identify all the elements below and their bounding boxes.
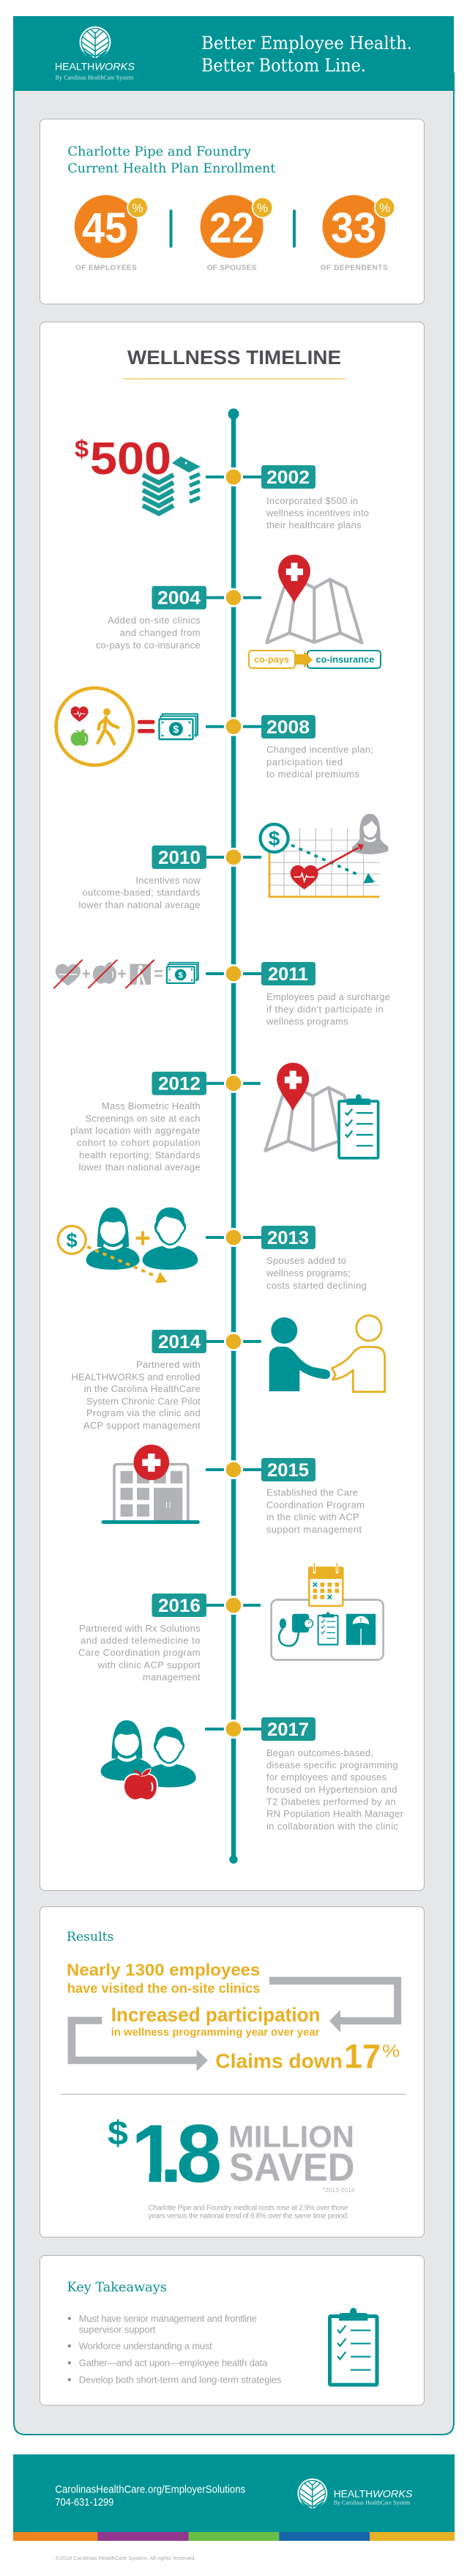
description: T2 Diabetes performed by an <box>266 1796 396 1807</box>
description: Began outcomes-based, <box>266 1747 373 1758</box>
description: Spouses added to <box>266 1255 346 1266</box>
description: for employees and spouses <box>266 1772 386 1783</box>
description: if they didn't participate in <box>266 1004 384 1015</box>
description: management <box>143 1672 201 1682</box>
footnote: years versus the national trend of 6.8% over the same time period. <box>148 2213 348 2221</box>
bullet list: Gather—and act upon—employee health data <box>79 2357 268 2368</box>
icon: map with pin and co-pays to co-insurance <box>249 555 381 668</box>
node <box>206 964 262 983</box>
description: in the clinic with ACP <box>266 1511 359 1522</box>
takeaways heading: Key Takeaways <box>67 2279 167 2295</box>
stat: 33% of dependents: % <box>379 201 390 215</box>
arrow: to claims down <box>67 2017 208 2071</box>
description: in collaboration with the clinic <box>266 1821 398 1832</box>
enrollment heading: Current Health Plan Enrollment <box>67 160 276 176</box>
description: wellness programs; <box>266 1267 351 1278</box>
stat: 33% of dependents: OF DEPENDENTS <box>321 264 388 272</box>
logo: Healthworks: HEALTH <box>55 62 94 73</box>
footer banner <box>13 2454 455 2541</box>
year badge <box>261 465 315 489</box>
description: disease specific programming <box>266 1760 398 1770</box>
stat: 22% of spouses: % <box>257 201 268 215</box>
stat: 45% of employees: 45 <box>82 204 127 252</box>
description: wellness incentives into <box>266 507 369 519</box>
stat: 45% of employees <box>75 195 149 272</box>
description: outcome-based; standards <box>82 887 201 898</box>
icon: spouses and declining cost: $ <box>67 1229 78 1251</box>
logo: Healthworks: By Carolinas HealthCare System <box>56 74 134 81</box>
stat: 22% of spouses: OF SPOUSES <box>207 264 257 272</box>
description: and added telemedicine to <box>81 1635 201 1646</box>
title: Better Bottom Line. <box>201 56 366 76</box>
stat: 33% of dependents <box>321 195 395 272</box>
description: lower than national average <box>79 899 201 910</box>
result: claims down 17%: Claims down <box>215 2049 343 2072</box>
description: ACP support management <box>83 1420 201 1431</box>
contact details: CarolinasHealthCare.org/EmployerSolutions <box>55 2483 245 2495</box>
colour stripe <box>13 2532 455 2541</box>
panel: key takeaways <box>40 2255 425 2405</box>
description <box>266 495 369 530</box>
copyright: ©2018 Carolinas HealthCare System. All rights reserved. <box>56 2555 196 2561</box>
result: claims down 17%: % <box>382 2041 400 2062</box>
year badge: 2015 <box>267 1460 309 1481</box>
result: claims down 17%: 17 <box>344 2037 381 2075</box>
icon: $500 cash stacks: $ <box>75 435 89 462</box>
entry: 2015 <box>102 1445 365 1535</box>
stat: 45% of employees: % <box>132 201 143 215</box>
node <box>206 848 261 867</box>
stat: $1.8 million saved: .8 <box>160 2108 222 2199</box>
footnote <box>148 2205 348 2221</box>
year badge <box>152 1330 206 1353</box>
footer logo <box>297 2479 413 2509</box>
description: Screenings on site at each <box>85 1113 201 1124</box>
bullet list: supervisor support <box>79 2324 156 2335</box>
description: costs started declining <box>266 1280 367 1291</box>
description: Mass Biometric Health <box>102 1100 201 1111</box>
description: their healthcare plans <box>266 519 362 530</box>
description <box>79 875 201 910</box>
description: health reporting; Standards <box>79 1150 201 1161</box>
stat: $1.8 million saved <box>108 2108 355 2199</box>
node <box>206 717 262 736</box>
icon: cost and health chart: $ <box>269 827 280 850</box>
result: increased participation: Increased participation <box>111 2004 321 2026</box>
description: Incorporated $500 in <box>266 495 358 506</box>
stat: 22% of spouses: 22 <box>209 204 254 252</box>
year badge: 2013 <box>267 1228 309 1248</box>
stat: 22% of spouses <box>201 195 273 272</box>
entry: 2013 <box>58 1207 367 1291</box>
node <box>206 588 261 607</box>
description: participation tied <box>266 756 343 767</box>
year badge <box>152 586 206 610</box>
divider <box>293 210 296 248</box>
node <box>206 1332 261 1351</box>
description: Established the Care <box>266 1487 358 1498</box>
node <box>206 1596 261 1615</box>
icon: no participation equals surcharge <box>53 960 198 988</box>
description: Added on-site clinics <box>108 615 201 626</box>
icon: spouses and declining cost <box>58 1207 198 1283</box>
description: Care Coordination program <box>78 1647 201 1658</box>
description: to medical premiums <box>266 769 360 780</box>
year badge <box>261 715 315 739</box>
description: focused on Hypertension and <box>266 1784 397 1795</box>
logo: Healthworks: WORKS <box>94 62 135 73</box>
description <box>266 1747 404 1832</box>
year badge: 2011 <box>268 964 308 985</box>
description: in the Carolina HealthCare <box>84 1383 201 1394</box>
stat: 33% of dependents: 33 <box>331 204 376 252</box>
timeline spine <box>228 409 239 1864</box>
icon: map with pin and co-pays to co-insurance: co-insurance <box>315 654 374 665</box>
year badge: 2008 <box>266 717 310 738</box>
icon: telemedicine devices <box>272 1563 384 1660</box>
year badge <box>152 1594 206 1617</box>
description <box>78 1623 201 1682</box>
description <box>266 1255 367 1291</box>
description <box>72 1359 201 1431</box>
entry: 2012 <box>70 1062 378 1173</box>
description: System Chronic Care Pilot <box>86 1396 201 1407</box>
footnote: Charlotte Pipe and Foundry medical costs rose at 2.9% over those <box>148 2205 348 2213</box>
footer logo: WORKS <box>373 2487 413 2499</box>
year badge <box>152 1072 206 1095</box>
enrollment heading <box>67 144 276 176</box>
year badge <box>152 845 206 869</box>
year badge <box>261 1226 315 1249</box>
entry: 2014 <box>72 1316 385 1431</box>
node <box>206 1228 262 1247</box>
enrollment heading: Charlotte Pipe and Foundry <box>67 144 252 159</box>
result: nearly 1300 employees: have visited the on-site clinics <box>67 1981 260 1996</box>
year badge: 2002 <box>266 467 310 488</box>
description: lower than national average <box>79 1162 201 1173</box>
result: nearly 1300 employees: Nearly 1300 employees <box>67 1961 260 1980</box>
result: nearly 1300 employees <box>67 1961 260 1996</box>
entry: 2002 <box>75 434 369 530</box>
entry: 2010 <box>79 814 388 910</box>
description: Partnered with <box>136 1359 201 1370</box>
description: and changed from <box>120 627 201 638</box>
description: co-pays to co-insurance <box>96 640 201 651</box>
icon: clinic building <box>102 1445 200 1524</box>
icon: healthy behaviours equal cash: $ <box>173 723 179 735</box>
year badge: 2014 <box>158 1332 201 1352</box>
title <box>201 33 412 76</box>
results heading: Results <box>67 1930 113 1944</box>
logo: Healthworks <box>55 26 135 81</box>
description: wellness programs <box>266 1016 348 1027</box>
description: with clinic ACP support <box>97 1659 201 1670</box>
description: support management <box>266 1524 362 1535</box>
icon: map with pin and clipboard <box>265 1062 378 1158</box>
entry: 2008 <box>56 688 373 780</box>
stat: $1.8 million saved: 1 <box>131 2108 176 2199</box>
node <box>206 1460 262 1479</box>
header banner <box>13 16 454 91</box>
icon: map with pin and co-pays to co-insurance: co-pays <box>254 654 289 665</box>
icon: $500 cash stacks: 500 <box>90 434 171 484</box>
description <box>70 1100 201 1173</box>
stat: $1.8 million saved: MILLION <box>228 2120 354 2154</box>
arrow: to increased participation <box>269 1977 401 2032</box>
description: Incentives now <box>135 875 201 886</box>
year badge: 2004 <box>157 588 201 609</box>
heading: WELLNESS TIMELINE <box>127 347 341 369</box>
year badge <box>261 1458 315 1481</box>
panel: enrollment <box>40 119 425 304</box>
node <box>206 467 262 486</box>
description: Program via the clinic and <box>86 1407 201 1418</box>
year badge: 2010 <box>158 848 201 868</box>
year badge: 2017 <box>267 1720 309 1740</box>
entry: 2017 <box>101 1717 404 1832</box>
stat: $1.8 million saved: SAVED <box>229 2146 354 2190</box>
divider <box>170 210 173 248</box>
description: Changed incentive plan; <box>266 744 373 755</box>
bullet list <box>68 2313 282 2385</box>
entry: 2004 <box>96 555 381 668</box>
icon: clipboard <box>329 2308 377 2385</box>
year badge: 2012 <box>158 1074 201 1095</box>
footer logo: By Carolinas HealthCare System <box>334 2499 411 2506</box>
year badge <box>261 962 315 985</box>
icon: healthy behaviours equal cash <box>56 688 198 765</box>
title: Better Employee Health. <box>201 33 412 53</box>
description <box>266 991 390 1027</box>
icon: handshake <box>269 1316 385 1392</box>
description: Employees paid a surcharge <box>266 991 390 1002</box>
stat: 45% of employees: OF EMPLOYEES <box>75 264 137 272</box>
year badge: 2016 <box>158 1596 201 1616</box>
year badge <box>261 1717 315 1741</box>
stat: $1.8 million saved: $ <box>108 2114 128 2152</box>
panel: results <box>40 1906 425 2238</box>
result: increased participation: in wellness programming year over year <box>111 2026 320 2038</box>
description: cohort to cohort population <box>77 1137 201 1148</box>
icon: couple with apple <box>101 1720 196 1800</box>
description <box>266 744 373 780</box>
description <box>96 615 201 651</box>
bullet list: Workforce understanding a must <box>79 2340 212 2351</box>
description <box>266 1487 365 1535</box>
node <box>206 1074 261 1093</box>
entry: 2016 <box>78 1563 384 1682</box>
footer logo: HEALTH <box>334 2487 373 2499</box>
result: claims down 17% <box>215 2037 400 2075</box>
description: Coordination Program <box>266 1499 365 1510</box>
icon: cost and health chart <box>261 814 388 897</box>
contact details <box>55 2483 245 2509</box>
result: increased participation <box>111 2004 321 2038</box>
bullet list: Must have senior management and frontline <box>79 2313 257 2324</box>
description: plant location with aggregate <box>70 1125 201 1136</box>
description: HEALTHWORKS and enrolled <box>72 1372 201 1383</box>
bullet list: Develop both short-term and long-term strategies <box>79 2374 282 2385</box>
entry: 2011 <box>53 960 390 1027</box>
contact details: 704-631-1299 <box>55 2496 113 2509</box>
description: RN Population Health Manager <box>266 1808 404 1819</box>
panel: wellness timeline <box>40 322 425 1890</box>
icon: $500 cash stacks <box>75 434 201 514</box>
icon: no participation equals surcharge: $ <box>178 971 183 980</box>
description: Partnered with Rx Solutions <box>79 1623 201 1634</box>
node <box>205 1720 262 1739</box>
stat: $1.8 million saved: *2013-2016 <box>323 2187 355 2194</box>
